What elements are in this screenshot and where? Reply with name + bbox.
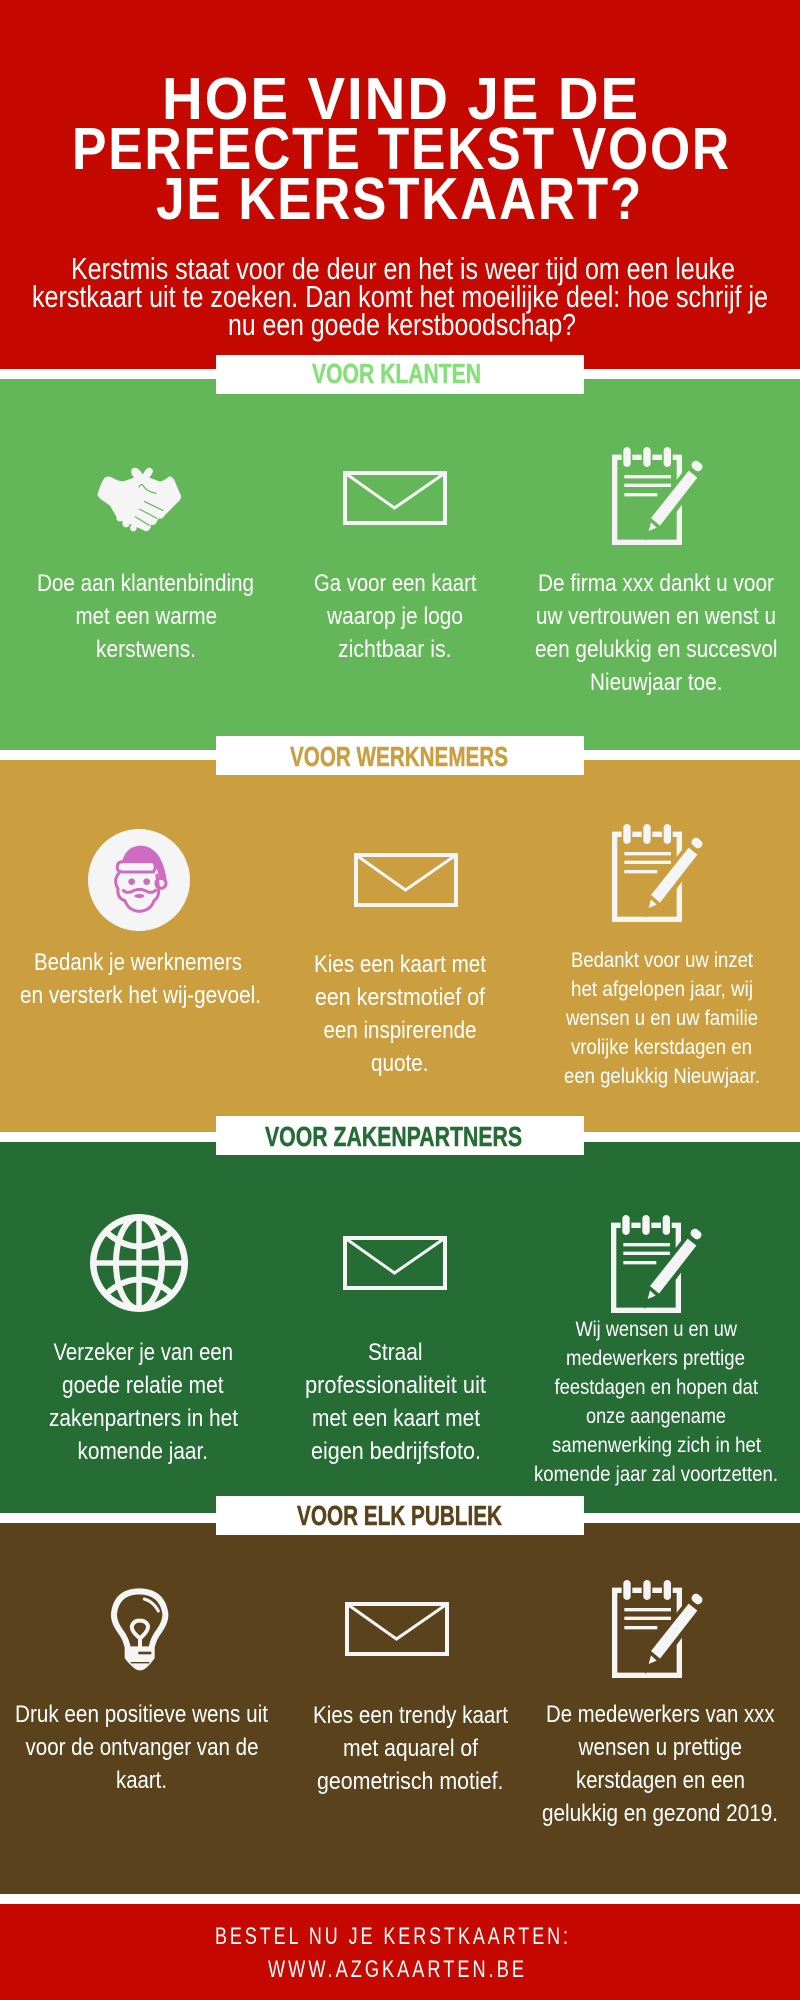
text: kerstmotief: een kerstmotief of: [315, 984, 485, 1011]
text: klantenbinding: met een warme: [76, 603, 217, 630]
text: relatie: goede relatie met: [62, 1372, 224, 1399]
icon: notepad: [615, 445, 704, 542]
heading: voor klanten: VOOR KLANTEN: [312, 358, 481, 389]
text: kerstmotief: een inspirerende: [324, 1017, 476, 1044]
text: logo: [314, 570, 477, 663]
text: voorbeeld klanten: [535, 570, 778, 696]
text: kerstmotief: [314, 951, 486, 1077]
text: voorbeeld publiek: kerstdagen en een: [576, 1767, 745, 1794]
heading: voor elk publiek: VOOR ELK PUBLIEK: [297, 1500, 502, 1531]
icon: envelope: [347, 1604, 447, 1654]
panel: voor zakenpartners: [0, 1142, 800, 1513]
text: voorbeeld zakenpartners: medewerkers prettige: [566, 1347, 745, 1370]
icon: notepad: [615, 1578, 704, 1675]
heading: voor elk publiek: [216, 1496, 584, 1535]
text: trendy kaart: Kies een trendy kaart: [313, 1702, 508, 1729]
text: wij-gevoel: [20, 949, 261, 1009]
footer: [0, 1904, 800, 2000]
text: wij-gevoel: Bedank je werknemers: [34, 949, 242, 976]
text: voorbeeld werknemers: een gelukkig Nieuwjaar.: [564, 1065, 760, 1088]
panel: voor elk publiek: [0, 1523, 800, 1894]
text: voorbeeld zakenpartners: onze aangename: [586, 1405, 726, 1428]
text: voorbeeld klanten: Nieuwjaar toe.: [590, 669, 722, 696]
text: bedrijfsfoto: met een kaart met: [312, 1405, 480, 1432]
text: logo: zichtbaar is.: [338, 636, 452, 663]
text: trendy kaart: [313, 1702, 508, 1795]
text: voorbeeld zakenpartners: samenwerking zich in het: [552, 1434, 761, 1457]
text: relatie: Verzeker je van een: [54, 1339, 233, 1366]
heading: voor zakenpartners: [216, 1116, 584, 1155]
text: logo: waarop je logo: [326, 603, 463, 630]
icon: notepad: [615, 822, 704, 919]
panel: voor werknemers: [0, 760, 800, 1132]
text: positieve wens: voor de ontvanger van de: [26, 1734, 258, 1761]
text: voorbeeld publiek: wensen u prettige: [578, 1734, 742, 1761]
text: kerstmotief: Kies een kaart met: [314, 951, 486, 978]
header band: [0, 0, 800, 369]
text: voorbeeld werknemers: het afgelopen jaar, wij: [571, 978, 753, 1001]
text: voorbeeld publiek: [542, 1701, 778, 1827]
text: kerstmotief: quote.: [371, 1050, 428, 1077]
text: positieve wens: kaart.: [116, 1767, 167, 1794]
text: logo: Ga voor een kaart: [314, 570, 477, 597]
icon: light bulb: [114, 1591, 165, 1669]
intro text: [32, 251, 768, 342]
text: voorbeeld werknemers: vrolijke kerstdagen en: [571, 1036, 752, 1059]
icon: envelope: [345, 473, 445, 523]
heading: voor zakenpartners: VOOR ZAKENPARTNERS: [265, 1121, 522, 1152]
title: [72, 66, 731, 232]
text: relatie: [49, 1339, 238, 1465]
title: HOE VIND JE DE: [162, 66, 640, 132]
text: voorbeeld zakenpartners: feestdagen en hopen dat: [554, 1376, 758, 1399]
icon: santa: [88, 829, 190, 931]
text: bedrijfsfoto: professionaliteit uit: [305, 1372, 486, 1399]
icon: envelope: [345, 1238, 445, 1288]
icon: handshake: [97, 468, 181, 531]
text: positieve wens: [15, 1701, 268, 1794]
text: trendy kaart: met aquarel of: [343, 1735, 478, 1762]
text: bedrijfsfoto: eigen bedrijfsfoto.: [311, 1438, 481, 1465]
text: bedrijfsfoto: [305, 1339, 486, 1465]
title: JE KERSTKAART?: [156, 166, 643, 232]
heading: voor werknemers: VOOR WERKNEMERS: [290, 741, 508, 772]
panel: voor klanten: [0, 379, 800, 750]
text: trendy kaart: geometrisch motief.: [317, 1768, 504, 1795]
text: voorbeeld werknemers: wensen u en uw familie: [565, 1007, 758, 1030]
text: voorbeeld werknemers: Bedankt voor uw inzet: [571, 949, 753, 972]
text: klantenbinding: kerstwens.: [96, 636, 196, 663]
text: positieve wens: Druk een positieve wens uit: [15, 1701, 268, 1728]
text: klantenbinding: [37, 570, 254, 663]
footer: WWW.AZGKAARTEN.BE: [268, 1956, 527, 1983]
icon: envelope: [356, 855, 456, 905]
text: relatie: komende jaar.: [78, 1438, 208, 1465]
text: relatie: zakenpartners in het: [49, 1405, 238, 1432]
text: bedrijfsfoto: Straal: [368, 1339, 422, 1366]
text: voorbeeld zakenpartners: [534, 1318, 778, 1486]
footer: BESTEL NU JE KERSTKAARTEN:: [215, 1923, 571, 1950]
text: wij-gevoel: en versterk het wij-gevoel.: [20, 982, 261, 1009]
text: voorbeeld werknemers: [564, 949, 760, 1088]
text: voorbeeld zakenpartners: Wij wensen u en uw: [576, 1318, 738, 1341]
heading: voor klanten: [216, 355, 584, 394]
intro text: nu een goede kerstboodschap?: [228, 307, 576, 342]
icon: globe: [92, 1216, 186, 1310]
icon: notepad: [614, 1213, 703, 1310]
heading: voor werknemers: [216, 736, 584, 775]
text: klantenbinding: Doe aan klantenbinding: [37, 570, 254, 597]
